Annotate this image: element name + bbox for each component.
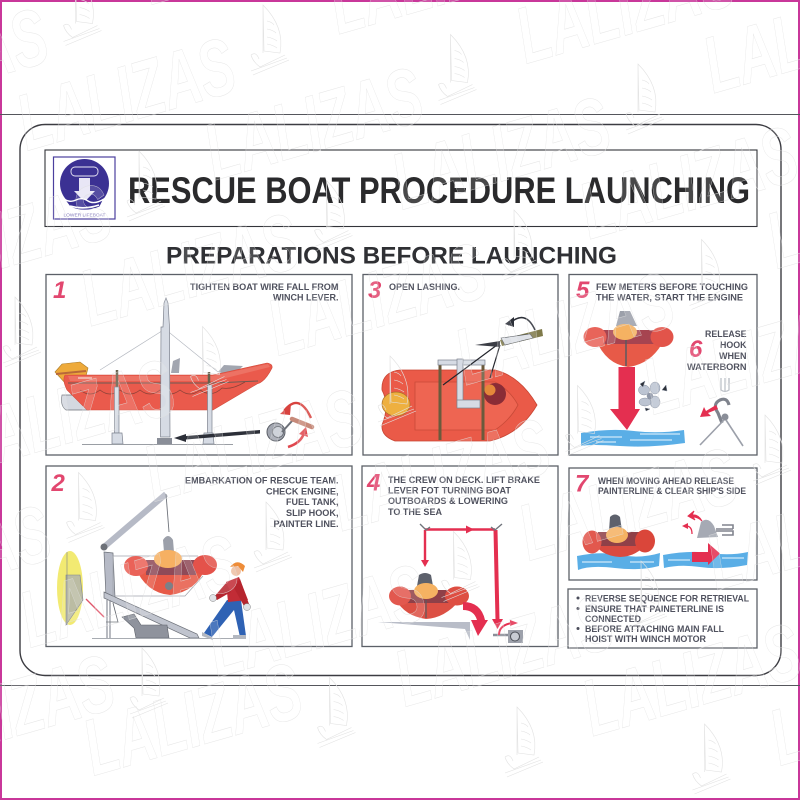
watermark overlay: LALIZAS — [382, 80, 620, 226]
step 7 text: PAINTERLINE & CLEAR SHIP'S SIDE — [598, 486, 746, 496]
panel: step 1 — [46, 274, 352, 455]
illustration: boat top view — [382, 317, 543, 441]
icon: propeller — [638, 381, 667, 411]
step 6 text — [687, 329, 747, 372]
lower band line — [0, 684, 800, 686]
watermark overlay: LALIZAS — [74, 646, 312, 792]
watermark overlay: LALIZAS — [198, 547, 436, 694]
step number 5: 5 — [576, 277, 590, 304]
watermark overlay: LALIZAS — [195, 50, 433, 197]
step 2 text: FUEL TANK, — [286, 497, 338, 507]
step 4 text — [388, 475, 540, 517]
arrow: turning outboard — [463, 602, 488, 636]
arrow: detail pointer — [86, 599, 104, 617]
illustration: boat lowering — [584, 311, 674, 367]
icon: lower lifeboat: LOWER LIFEBOAT — [64, 212, 106, 218]
step 2 text: SLIP HOOK, — [286, 508, 338, 518]
arrow: lowering down — [610, 367, 640, 430]
icon: release hook — [700, 378, 743, 446]
panel: retrieval notes — [568, 589, 757, 648]
step 7 text: WHEN MOVING AHEAD RELEASE — [598, 476, 734, 486]
notes text: CONNECTED — [585, 614, 641, 624]
step 4 text: THE CREW ON DECK. LIFT BRAKE — [388, 475, 540, 485]
watermark overlay: LALIZAS — [385, 577, 623, 723]
step number 6: 6 — [689, 336, 703, 363]
watermark overlay: LALIZAS — [134, 372, 372, 518]
notes text: BEFORE ATTACHING MAIN FALL — [585, 624, 724, 634]
water highlight — [582, 558, 744, 562]
watermark overlay: LALIZAS — [10, 518, 248, 664]
watermark overlay: LALIZAS — [258, 226, 496, 372]
notes text: ENSURE THAT PAINETERLINE IS — [585, 604, 724, 614]
step 7 text — [598, 476, 746, 496]
step 4 text: TO THE SEA — [388, 507, 442, 517]
illustration: detail inset — [57, 551, 83, 625]
icon: winch lever — [267, 403, 312, 447]
step 5 text: FEW METERS BEFORE TOUCHING — [596, 282, 748, 292]
illustration: boat — [389, 573, 469, 619]
illustration: boat on davit — [55, 298, 272, 445]
panel: step 5 and 6 — [569, 274, 757, 455]
step 5 text — [596, 282, 748, 302]
illustration: davit and boat — [92, 494, 246, 638]
step 4 text: OUTBOARDS & LOWERING — [388, 496, 508, 506]
step 4 text: LEVER FOT TURNING BOAT — [388, 486, 511, 496]
illustration: boat on water — [582, 514, 655, 557]
step 3 text: OPEN LASHING. — [389, 282, 460, 292]
illustration: crew member — [202, 562, 250, 640]
step 2 text: PAINTER LINE. — [274, 519, 338, 529]
icon: lower lifeboat — [54, 157, 115, 219]
step 1 text: WINCH LEVER. — [273, 292, 338, 302]
step 6 text: HOOK — [720, 340, 747, 350]
notes text — [585, 594, 749, 644]
arrow: moving ahead — [692, 543, 720, 565]
water — [577, 552, 748, 570]
sign outline — [20, 124, 781, 676]
watermark overlay: LALIZAS — [71, 196, 309, 343]
step 6 text: WATERBORN — [687, 362, 747, 372]
icon: release painter line — [682, 511, 733, 538]
step number 7: 7 — [575, 470, 590, 498]
upper band line — [0, 114, 800, 116]
notes text: HOIST WITH WINCH MOTOR — [585, 634, 706, 644]
water — [581, 430, 685, 447]
arrows: wire path — [420, 524, 503, 629]
step 5 text: THE WATER, START THE ENGINE — [596, 292, 743, 302]
watermark overlay: LALIZAS — [446, 255, 684, 402]
step 2 text: CHECK ENGINE, — [266, 486, 338, 496]
water highlight — [590, 434, 680, 442]
notes text: REVERSE SEQUENCE FOR RETRIEVAL — [585, 594, 749, 604]
panel: step 3 — [363, 274, 558, 455]
step 6 text: RELEASE — [705, 329, 746, 339]
step 2 text — [185, 476, 338, 529]
panel: step 7 — [569, 468, 757, 580]
title box — [45, 150, 757, 226]
step number 4: 4 — [366, 470, 380, 496]
watermark overlay: LALIZAS — [322, 401, 560, 548]
icon: brake winch — [493, 620, 523, 643]
step number 1: 1 — [53, 277, 66, 304]
step 2 text: EMBARKATION OF RESCUE TEAM. — [185, 476, 338, 486]
step number 3: 3 — [368, 277, 382, 304]
panel: step 4 — [362, 466, 558, 646]
step 6 text: WHEN — [719, 351, 747, 361]
bullets — [576, 596, 580, 630]
panel: step 2 — [46, 466, 352, 646]
subheading: PREPARATIONS BEFORE LAUNCHING — [166, 242, 617, 270]
step 1 text — [190, 282, 339, 302]
ship deck — [378, 622, 470, 640]
arrow: to winch — [174, 430, 260, 442]
step number 2: 2 — [50, 470, 66, 497]
step 1 text: TIGHTEN BOAT WIRE FALL FROM — [190, 282, 339, 292]
